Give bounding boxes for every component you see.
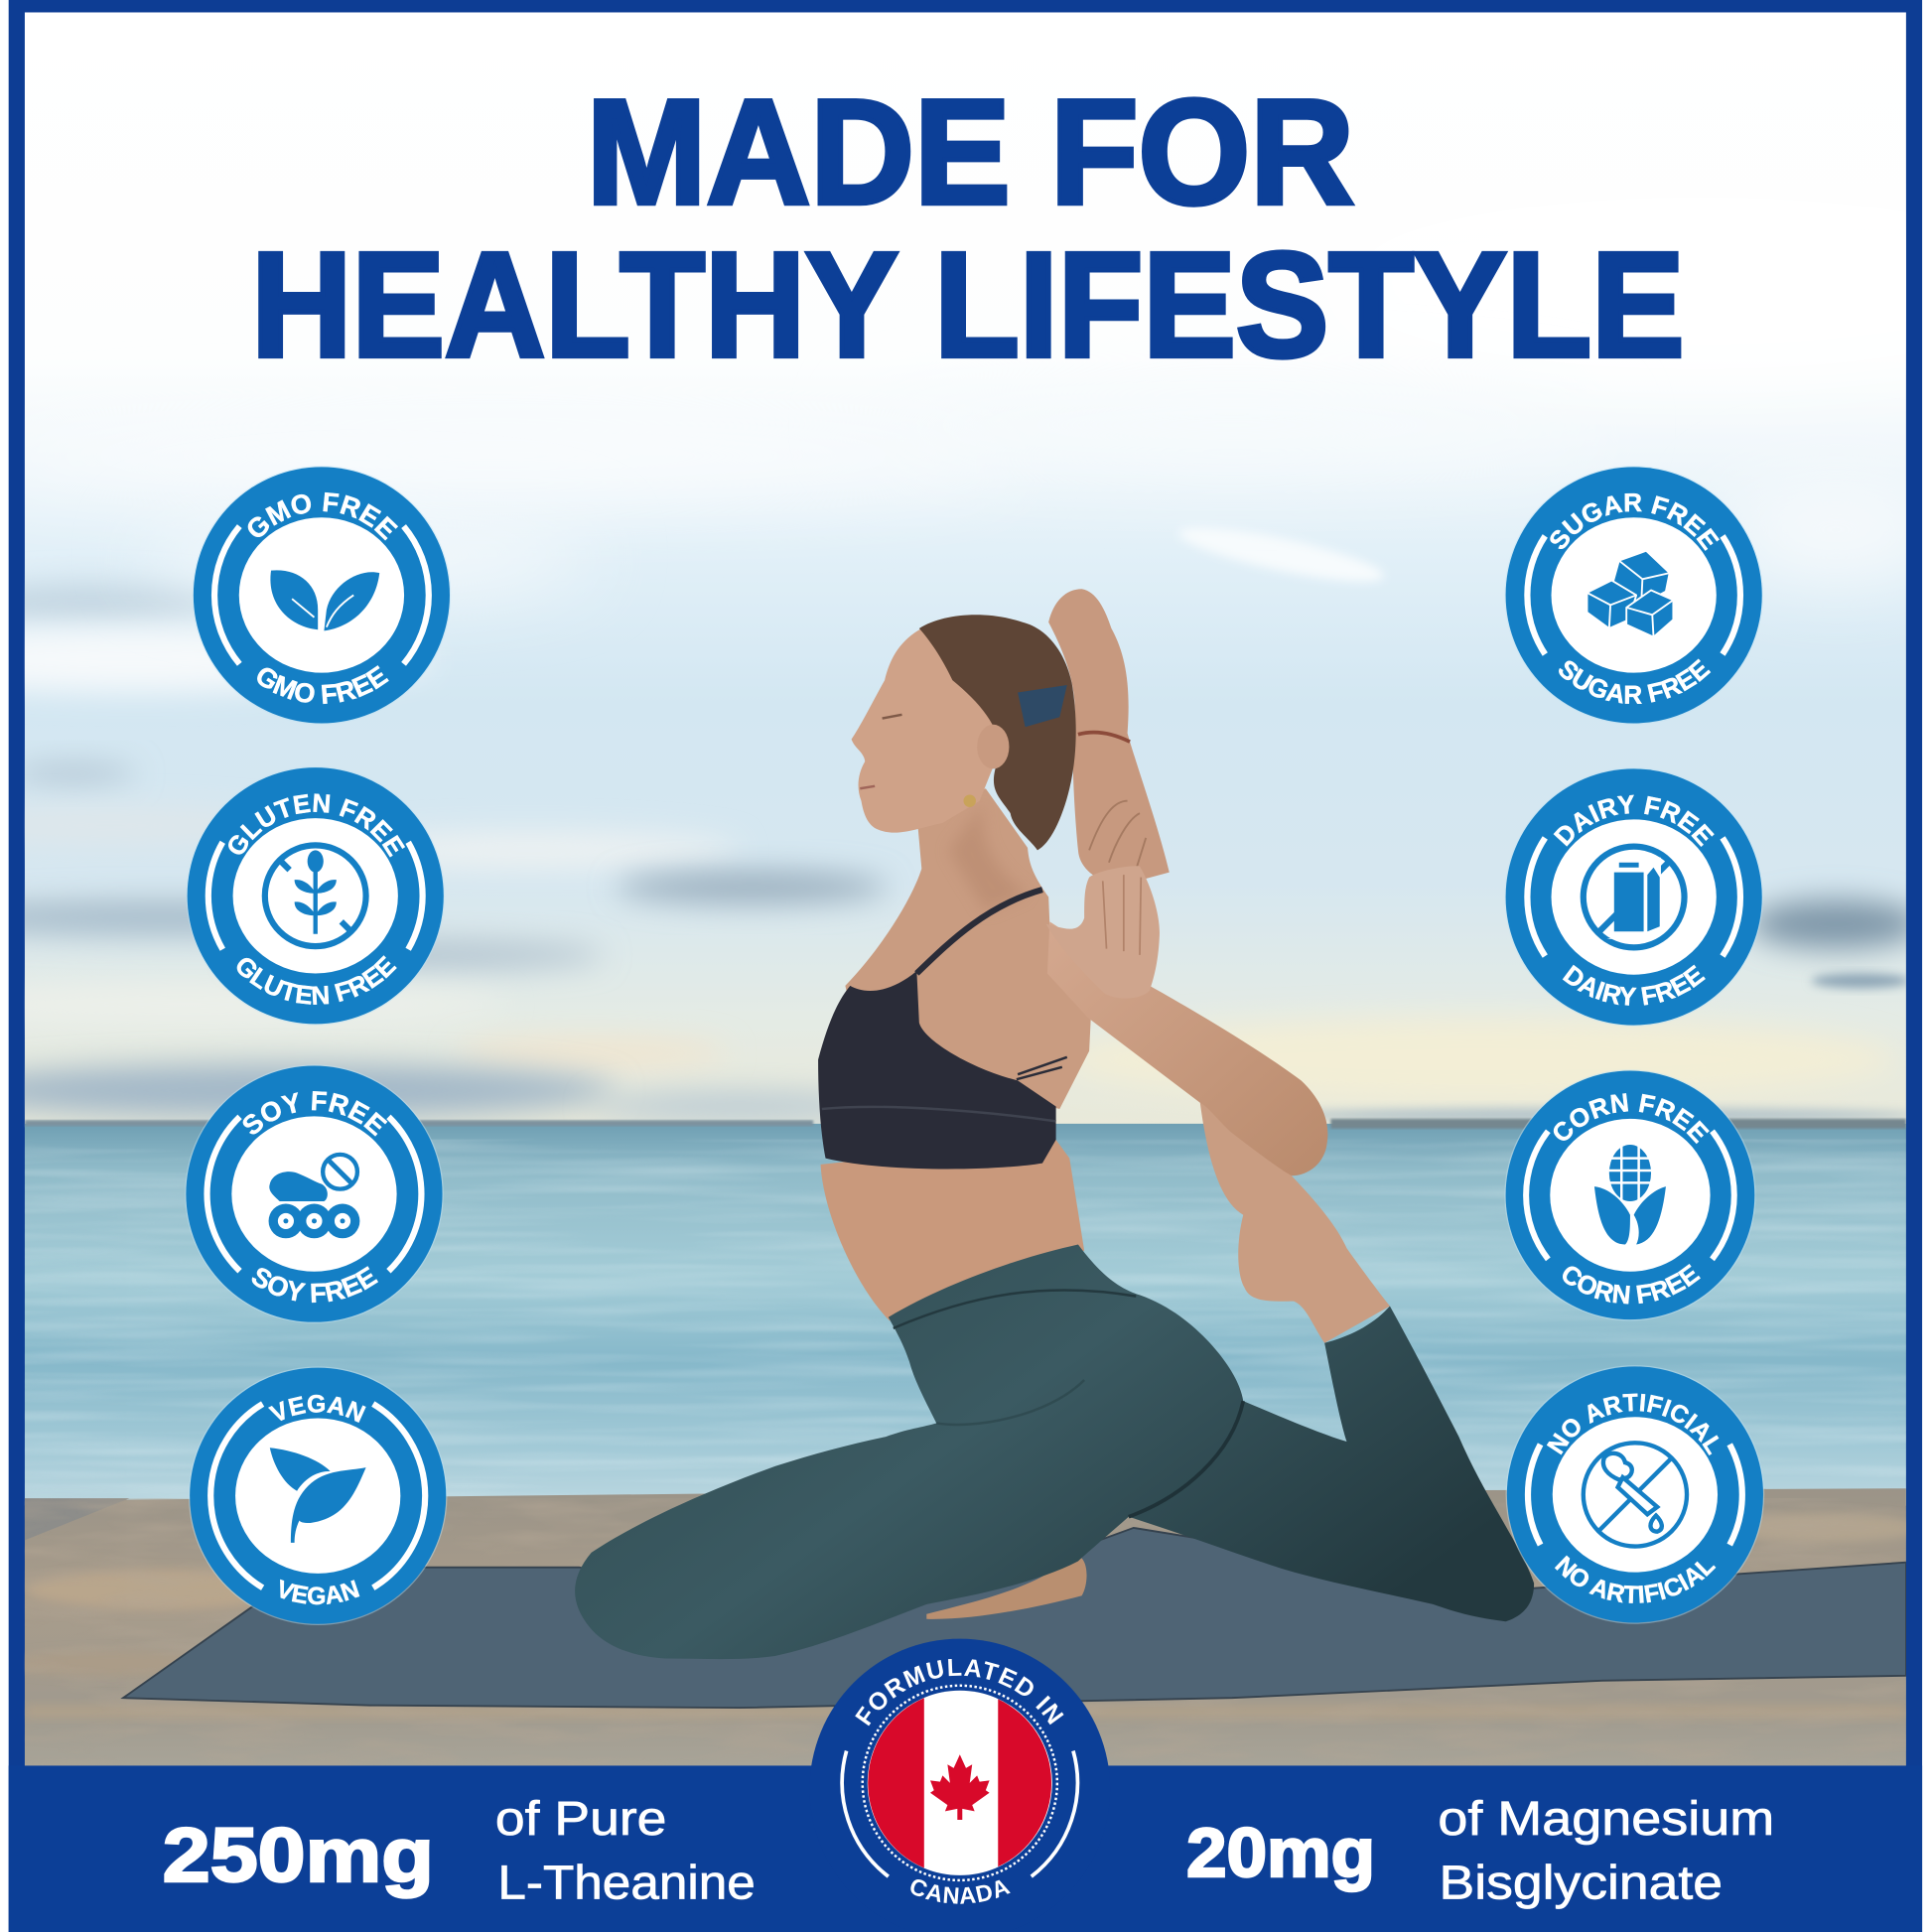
horizon land (25, 1119, 1906, 1129)
stat: 20mg of magnesium bisglycinate: Bisglycinate (1440, 1856, 1723, 1909)
badge: no artificial: NO ARTIFICIAL (1547, 1394, 1720, 1455)
badge: gluten free: GLUTEN FREE (228, 793, 405, 858)
badge: GMO free: GMO FREE (248, 492, 398, 540)
stat: 250mg of pure L-theanine: 250mg (163, 1813, 434, 1898)
lower arm (1047, 921, 1327, 1175)
raised arm (1048, 589, 1170, 886)
badge: dairy free: DAIRY FREE (1553, 794, 1715, 847)
icon: crossed-out dropper (1584, 1443, 1687, 1547)
badge: soy free: SOY FREE (242, 1091, 387, 1137)
stat: 250mg of pure L-theanine: L-Theanine (497, 1856, 756, 1909)
icon: sugar cubes (1587, 551, 1673, 637)
stat: 20mg of magnesium bisglycinate (1186, 1792, 1774, 1909)
badge: corn free: CORN FREE (1553, 1093, 1710, 1144)
icon: crossed-out wheat (265, 845, 366, 946)
clouds (0, 198, 1932, 1123)
badge: no artificial: NO ARTIFICIAL (1555, 1555, 1716, 1603)
hair clip (1018, 685, 1067, 727)
neck and shoulders (845, 788, 1092, 1109)
badge: dairy free (1504, 767, 1763, 1027)
badge: vegan: VEGAN (268, 1394, 366, 1423)
badge: gluten free: GLUTEN FREE (236, 955, 397, 1005)
leggings shading (894, 1290, 1243, 1517)
bracelet (1078, 733, 1130, 742)
sea ripples (25, 1140, 1906, 1503)
bra (818, 971, 1056, 1169)
stat: 250mg of pure L-theanine: of Pure (495, 1792, 666, 1846)
raised foot (1200, 1103, 1390, 1343)
title: HEALTHY LIFESTYLE (251, 221, 1685, 388)
badge: sugar free: SUGAR FREE (1550, 492, 1720, 551)
badge: no artificial (1506, 1365, 1764, 1624)
leggings (575, 1244, 1534, 1659)
badge: gluten free (186, 766, 445, 1026)
head and face (852, 628, 1004, 833)
badge: corn free (1504, 1069, 1756, 1320)
title: MADE FOR (587, 69, 1354, 235)
seal text: FORMULATED IN (851, 1655, 1068, 1730)
sky (25, 12, 1906, 1128)
woman figure (575, 589, 1534, 1659)
icon: two leaves (270, 570, 379, 630)
bra straps (916, 890, 1067, 1079)
badge: GMO free: GMO FREE (257, 665, 389, 705)
foot under hip (926, 1555, 1087, 1619)
badge: GMO free (193, 466, 451, 725)
badge: soy free: SOY FREE (252, 1266, 378, 1303)
icon: corn cob (1594, 1145, 1666, 1244)
stat: 250mg of pure L-theanine (163, 1792, 756, 1909)
badge: dairy free: DAIRY FREE (1563, 965, 1706, 1006)
neck shading (956, 825, 1015, 905)
Canada seal (809, 1639, 1110, 1932)
title (251, 69, 1685, 388)
seal rings (842, 1686, 1077, 1880)
badge: sugar free: SUGAR FREE (1559, 659, 1712, 704)
icon: vegan leaves (270, 1448, 366, 1543)
stat: 20mg of magnesium bisglycinate: 20mg (1186, 1814, 1375, 1891)
yoga mat (123, 1528, 1906, 1708)
lower hand fingers (1103, 875, 1141, 955)
icon: soybean pod (269, 1155, 359, 1238)
stone texture (0, 1498, 1922, 1765)
stat: 20mg of magnesium bisglycinate: of Magnesium (1438, 1792, 1774, 1846)
badge: vegan (189, 1366, 448, 1625)
badge: corn free: CORN FREE (1563, 1264, 1701, 1305)
stone ledge (25, 1488, 1906, 1765)
sea (25, 1124, 1906, 1506)
face features (860, 715, 901, 788)
badge: soy free (185, 1064, 444, 1323)
badge: sugar free (1504, 466, 1763, 725)
flag (868, 1691, 1052, 1875)
icon: crossed-out milk carton (1584, 847, 1685, 947)
midriff (821, 1140, 1084, 1320)
hair (919, 615, 1076, 850)
raised hand fingers (1088, 800, 1147, 866)
bottom info band (9, 1765, 1922, 1932)
ear (977, 725, 1009, 768)
lower hand (1046, 866, 1160, 999)
badge: vegan: VEGAN (280, 1579, 359, 1604)
bra band line (822, 1107, 1056, 1121)
Canada seal: CANADA (905, 1872, 1014, 1909)
earring (964, 794, 976, 807)
